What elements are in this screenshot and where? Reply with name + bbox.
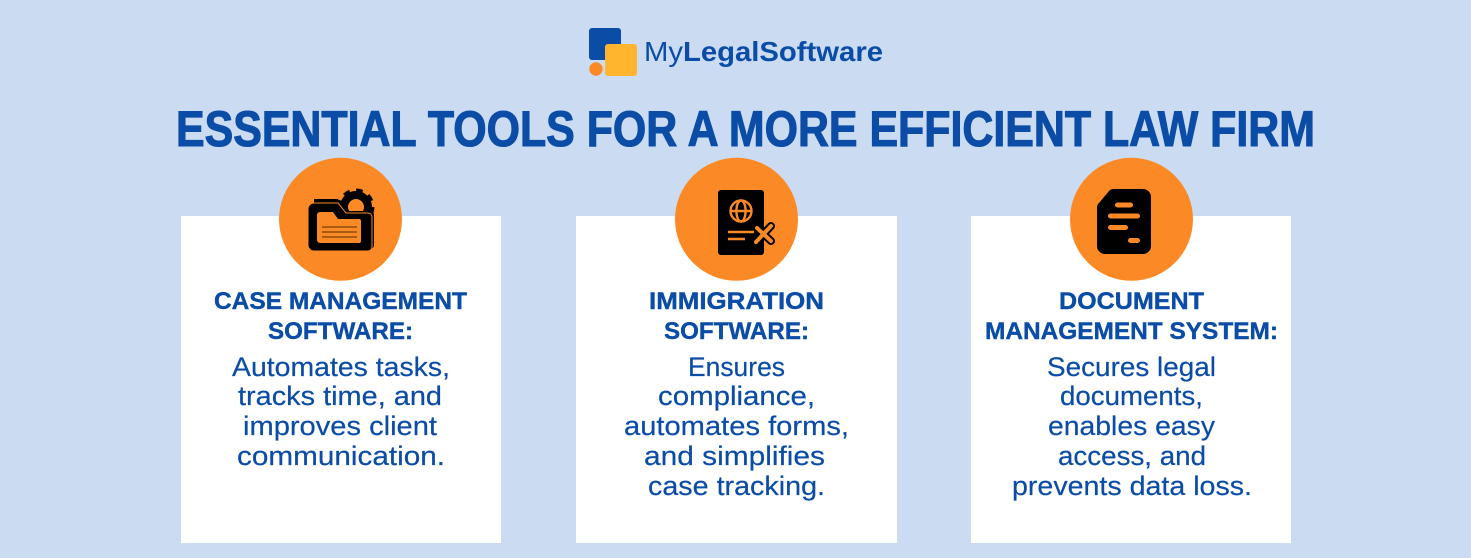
card description: documents, — [1060, 381, 1203, 411]
card description — [624, 352, 849, 501]
card description — [232, 352, 450, 471]
logo mark — [589, 28, 637, 76]
card background — [576, 216, 897, 543]
card description: Secures legal — [1047, 352, 1216, 382]
card description: communication. — [237, 441, 445, 471]
icon: document — [1070, 158, 1193, 281]
icon: passport with plane — [675, 158, 798, 281]
card description: Automates tasks, — [232, 352, 450, 382]
card background — [181, 216, 501, 543]
card description: access, and — [1058, 441, 1206, 471]
card heading: DOCUMENT — [1059, 288, 1204, 315]
card heading: CASE MANAGEMENT — [214, 288, 467, 315]
card description: tracks time, and — [238, 381, 442, 411]
card description: case tracking. — [648, 471, 825, 501]
title: ESSENTIAL TOOLS FOR A MORE EFFICIENT LAW FIRM — [176, 101, 1315, 157]
card description: enables easy — [1048, 411, 1216, 441]
panel: immigration software — [576, 158, 897, 543]
card heading: SOFTWARE: — [664, 318, 809, 345]
card description: improves client — [243, 411, 438, 441]
panel: document management system — [971, 158, 1291, 543]
icon: folder with gear — [279, 158, 402, 281]
panel: case management software — [181, 158, 501, 543]
card description: Ensures — [688, 352, 785, 382]
card heading: IMMIGRATION — [649, 288, 824, 315]
logo — [589, 28, 883, 76]
card description: and simplifies — [644, 441, 825, 471]
card heading: MANAGEMENT SYSTEM: — [985, 318, 1278, 345]
card description: prevents data loss. — [1012, 471, 1252, 501]
card description — [1012, 352, 1252, 501]
card heading: SOFTWARE: — [268, 318, 413, 345]
card heading — [214, 288, 467, 345]
card description: compliance, — [658, 381, 815, 411]
card description: automates forms, — [624, 411, 849, 441]
card background — [971, 216, 1291, 543]
card heading — [649, 288, 824, 345]
logo wordmark: MyLegalSoftware — [644, 36, 883, 67]
card heading — [985, 288, 1278, 345]
